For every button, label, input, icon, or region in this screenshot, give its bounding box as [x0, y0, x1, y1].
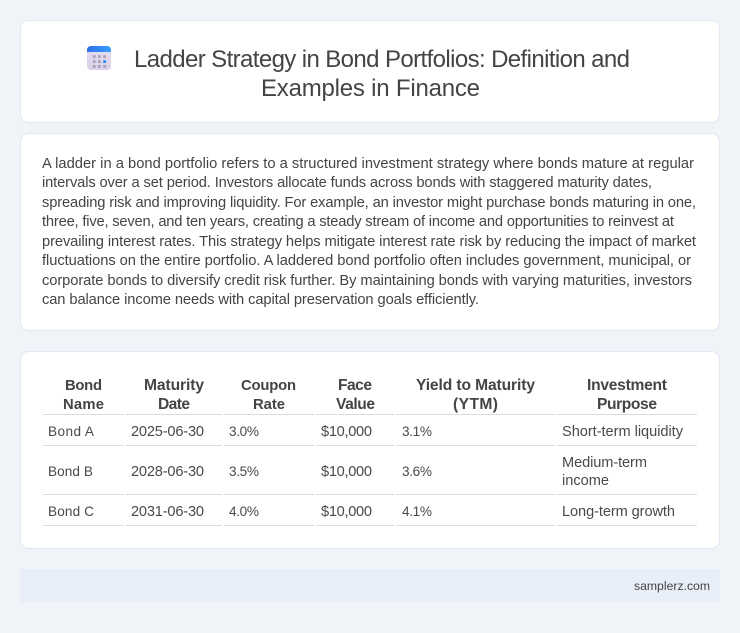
table row: Bond C — [43, 504, 697, 526]
text block: ladder strategy explanation: three, five, seven, and ten years, creating a steady stream of income and opportunities to reinvest at — [42, 214, 674, 230]
table row: Bond A: 2025-06-30 — [131, 424, 204, 440]
text block: ladder strategy explanation: prevailing interest rates. This strategy helps mitigate interest rate risk by reducing the impact of market — [42, 234, 696, 250]
table row: Bond B: income — [562, 473, 609, 489]
table header row: Name — [63, 397, 104, 413]
table row: Bond B: 3.5% — [229, 464, 259, 479]
table row: Bond C: $10,000 — [321, 504, 372, 520]
icon: calendar — [87, 46, 111, 70]
table row: Bond B: $10,000 — [321, 464, 372, 480]
footer — [20, 569, 720, 602]
table row: Bond B: Medium-term — [562, 455, 647, 471]
table row: Bond C: 2031-06-30 — [131, 504, 204, 520]
panel: description — [20, 134, 720, 330]
title: Ladder Strategy in Bond Portfolios: Definition and — [134, 46, 630, 73]
footer credit: samplerz.com — [634, 579, 710, 593]
table row: Bond A: Short-term liquidity — [562, 424, 684, 440]
table header row: Yield to Maturity — [416, 377, 535, 394]
table row: Bond A: 3.1% — [402, 424, 432, 439]
text block: ladder strategy explanation: can balance income needs with capital preservation goals efficiently. — [42, 292, 479, 308]
table header row: Coupon — [241, 378, 296, 394]
table header row: Rate — [253, 397, 285, 413]
panel: bond table — [20, 352, 720, 548]
table header row: Value — [336, 396, 375, 413]
text block: ladder strategy explanation: corporate bonds to diversify credit risk further. By maintaining bonds with varying maturities, investors — [42, 273, 692, 289]
table row: Bond A: Bond A — [48, 424, 95, 439]
table row: Bond C: 4.1% — [402, 504, 432, 519]
table header row: Bond — [65, 378, 102, 394]
text block: ladder strategy explanation: intervals over a set period. Investors allocate funds across bonds with staggered maturity dates, — [42, 175, 652, 191]
table header row: Maturity — [144, 377, 204, 394]
table header row: (YTM) — [453, 396, 498, 413]
table header row: Date — [158, 396, 190, 413]
text block: ladder strategy explanation: fluctuations on the entire portfolio. A laddered bond portfolio often includes government, municipal, or — [42, 253, 691, 269]
table row: Bond C: Bond C — [48, 504, 94, 519]
table row: Bond A: 3.0% — [229, 424, 259, 439]
text block: ladder strategy explanation — [42, 156, 696, 308]
table row: Bond B — [43, 455, 697, 495]
table row: Bond B: Bond B — [48, 464, 93, 479]
table header row: Purpose — [597, 396, 657, 413]
table row: Bond A: $10,000 — [321, 424, 372, 440]
table header row: Face — [338, 377, 372, 394]
table row: Bond C: 4.0% — [229, 504, 259, 519]
table header row — [43, 377, 697, 415]
title — [134, 46, 630, 102]
text block: ladder strategy explanation: A ladder in a bond portfolio refers to a structured investment strategy where bonds mature at regular — [42, 156, 694, 172]
table header row: Investment — [587, 377, 667, 394]
table row: Bond A — [43, 424, 697, 446]
panel: title header — [20, 20, 720, 122]
table row: Bond C: Long-term growth — [562, 504, 675, 520]
text block: ladder strategy explanation: spreading risk and improving liquidity. For example, an investor might purchase bonds maturing in one, — [42, 195, 696, 211]
title: Examples in Finance — [261, 75, 480, 102]
table row: Bond B: 3.6% — [402, 464, 432, 479]
table row: Bond B: 2028-06-30 — [131, 464, 204, 480]
